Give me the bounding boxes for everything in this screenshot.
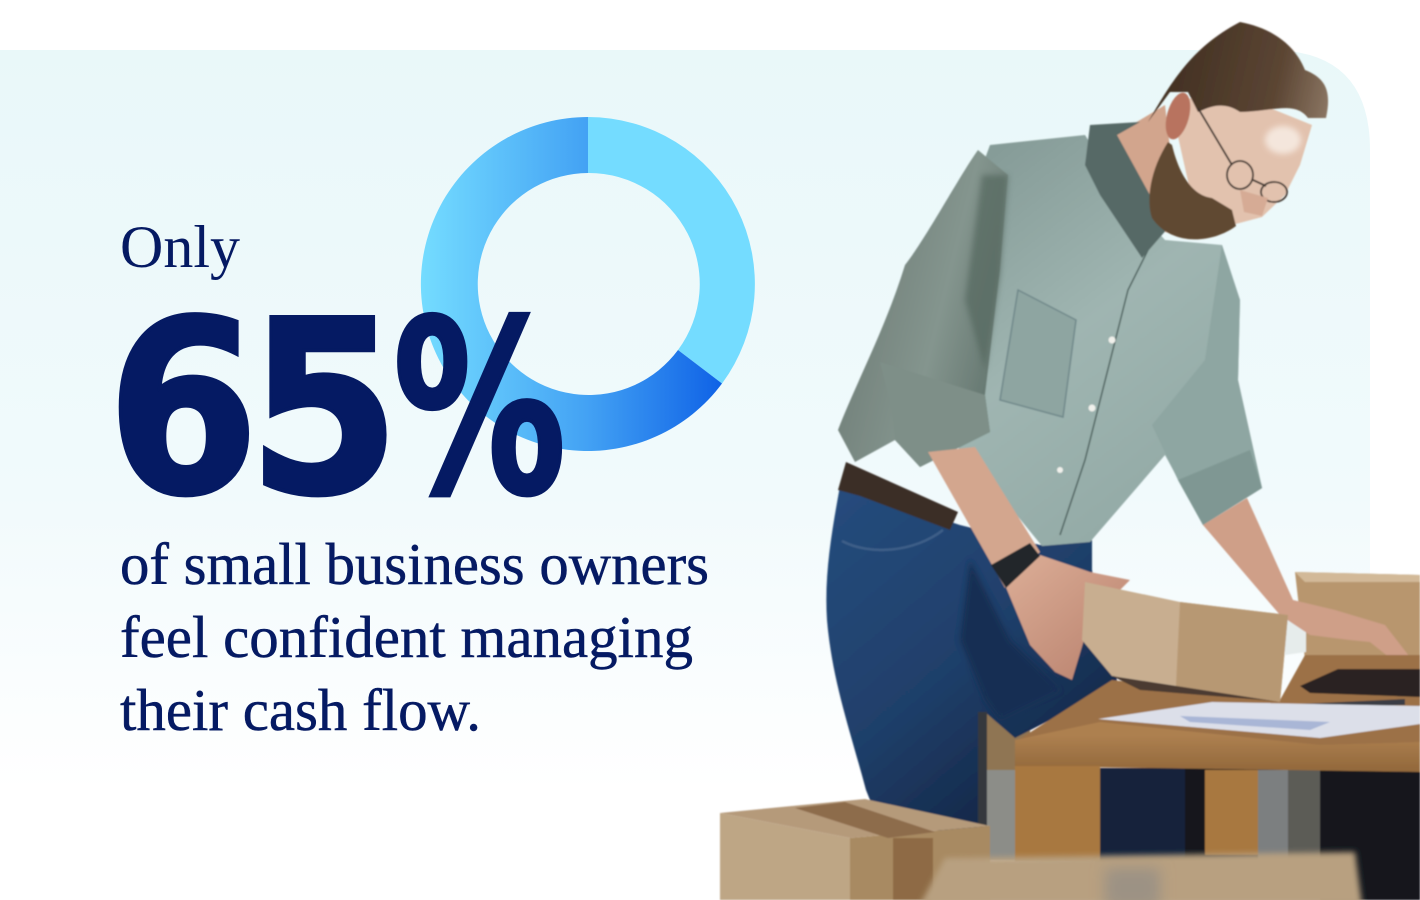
person: jeans thigh shade bbox=[960, 560, 1060, 720]
foreground box: blurred tape bbox=[1105, 868, 1160, 900]
desk: laptop bbox=[1300, 669, 1420, 697]
person: jeans pocket bbox=[842, 530, 943, 550]
person: near forearm bbox=[928, 447, 1040, 588]
person: near sleeve bbox=[838, 150, 1008, 467]
person: collar bbox=[1085, 122, 1168, 258]
big number: 65%: % bbox=[393, 270, 566, 549]
person: watch bbox=[991, 543, 1040, 588]
person: shirt torso bbox=[940, 135, 1262, 546]
person: nose bbox=[1240, 190, 1268, 216]
person: far sleeve bbox=[1152, 245, 1262, 525]
donut segment: 65 percent light blue bbox=[588, 117, 755, 384]
person: face bbox=[1172, 92, 1312, 225]
donut segment: 35 percent gradient blue bbox=[421, 117, 722, 451]
person: jeans bbox=[826, 486, 1118, 835]
text block: statistic description: feel confident managing bbox=[120, 604, 693, 670]
desk: front edge bbox=[1015, 722, 1420, 772]
photo background: under-desk shadow bbox=[985, 712, 1420, 900]
big number: 65% bbox=[107, 270, 566, 550]
desk: paper colour strip bbox=[1180, 716, 1330, 730]
big number: 65%: 65 bbox=[107, 270, 400, 550]
text: Only: Only bbox=[120, 214, 240, 280]
person: sleeve cuff fold bbox=[880, 362, 990, 467]
desk: pen bbox=[1300, 699, 1405, 708]
person: hair bbox=[1148, 22, 1328, 122]
person: far arm and hand bbox=[1203, 498, 1416, 665]
foreground box: left bbox=[720, 799, 990, 900]
photo: man packing box at desk bbox=[720, 22, 1420, 900]
foreground box: blurred bbox=[920, 852, 1362, 900]
person: neck bbox=[1115, 105, 1180, 235]
person: shirt buttons bbox=[1057, 336, 1116, 473]
person: sleeve shadow bbox=[965, 175, 1008, 370]
text block: statistic description: of small business owners bbox=[120, 531, 709, 597]
person: beard bbox=[1149, 142, 1236, 239]
photo background: back box bbox=[1285, 572, 1420, 660]
desk: top surface bbox=[1015, 655, 1420, 770]
donut chart: 65 percent ring bbox=[421, 117, 755, 451]
person: glasses bbox=[1198, 108, 1287, 202]
person: shirt pocket bbox=[1000, 290, 1076, 417]
text block: statistic description bbox=[120, 531, 709, 743]
desk: legs bbox=[1015, 766, 1258, 861]
text block: statistic description: their cash flow. bbox=[120, 677, 481, 743]
person: placket bbox=[1060, 250, 1148, 535]
person: ear bbox=[1161, 90, 1195, 142]
person: rolled far cuff bbox=[1178, 450, 1262, 525]
desk: papers bbox=[1098, 702, 1420, 738]
person: near hand bbox=[1005, 555, 1130, 680]
person: dark strip behind leg bbox=[978, 712, 987, 827]
held box bbox=[1082, 582, 1288, 702]
person: belt bbox=[838, 462, 958, 530]
person: forehead highlight bbox=[1265, 126, 1301, 154]
